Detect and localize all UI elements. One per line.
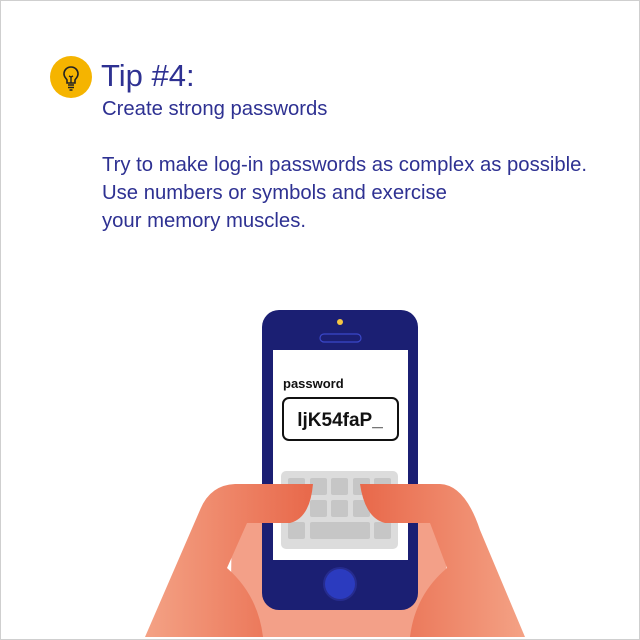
phone: ljK54faP_ [297,410,383,431]
body text: your memory muscles. [102,210,306,232]
phone: password [283,376,344,391]
title: Tip #4: [101,58,195,93]
body text [102,154,587,232]
icon: lightbulb [50,56,92,98]
phone [262,310,418,610]
subtitle: Create strong passwords [102,98,327,120]
palm [230,523,450,637]
body text: Try to make log-in passwords as complex as possible. [102,154,587,176]
right hand [360,484,525,637]
body text: Use numbers or symbols and exercise [102,182,447,204]
left hand [145,484,313,637]
